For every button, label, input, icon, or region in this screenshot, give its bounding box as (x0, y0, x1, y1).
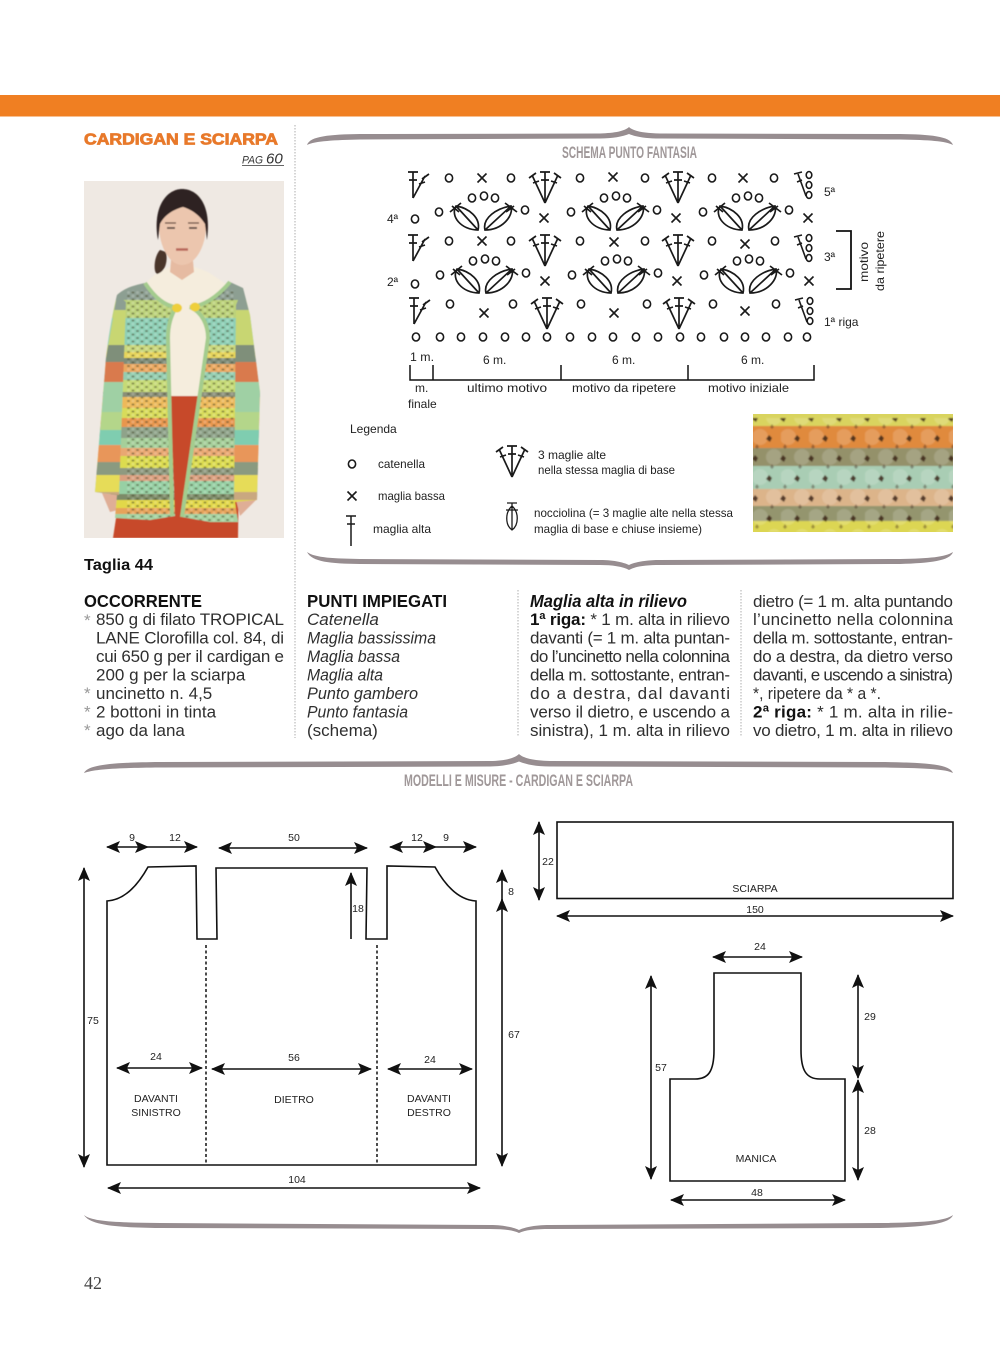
column: stitches used: Maglia bassa (307, 647, 400, 666)
stitch count scale: 1 m. (410, 350, 434, 364)
column: continuation (753, 592, 954, 740)
pattern outline (107, 866, 476, 1165)
measurements: DAVANTI (134, 1093, 178, 1105)
hair (157, 189, 208, 240)
arrows (84, 847, 502, 1188)
photo: model wearing cardigan (84, 181, 284, 538)
column: continuation: 2ª riga: * 1 m. alta in rilie- (753, 702, 953, 722)
measurements: 18 (352, 903, 364, 915)
legend: three double crochet: 3 maglie alte (538, 448, 606, 462)
measurements: 9 (443, 832, 449, 844)
column: raised double crochet: della m. sottostante, entran- (530, 666, 730, 684)
row labels: 3ª (824, 250, 836, 264)
legend: chain: catenella (378, 457, 425, 471)
page reference: 60 (266, 150, 283, 168)
row labels: 1ª riga (824, 315, 859, 329)
row 3 (408, 235, 812, 266)
cardigan pattern schematic (84, 832, 520, 1188)
sleeve pattern schematic: 48 (751, 1187, 763, 1199)
legend: single crochet: maglia bassa (378, 489, 445, 503)
stitch count scale: 6 m. (741, 353, 764, 367)
measurements: DESTRO (407, 1107, 451, 1119)
repeat bracket: motivo (857, 242, 871, 282)
row 5 (408, 172, 812, 203)
legend: chain (348, 457, 425, 471)
column: raised double crochet: 1ª riga: * 1 m. alta in rilievo (530, 610, 730, 629)
scarf pattern schematic: 22 (542, 856, 554, 868)
column: materials: LANE Clorofilla col. 84, di (96, 628, 284, 648)
brace: bottom of stitch chart (307, 552, 953, 570)
column: raised double crochet: do a destra, dal davanti (530, 684, 730, 703)
neck (170, 260, 194, 280)
column: stitches used: PUNTI IMPIEGATI (307, 591, 447, 611)
legend: double crochet (346, 516, 431, 546)
column: materials: * (84, 721, 91, 740)
heading: stitch chart: SCHEMA PUNTO FANTASIA (562, 143, 697, 162)
stitch count scale: ultimo motivo (467, 381, 547, 395)
sleeve pattern schematic: 29 (864, 1011, 876, 1023)
column: materials (84, 591, 284, 740)
measurements: 56 (288, 1052, 300, 1064)
row 2 (411, 255, 814, 293)
repeat bracket (836, 231, 887, 291)
column: raised double crochet: sinistra), 1 m. alta in rilievo (530, 721, 730, 740)
column: raised double crochet: davanti (= 1 m. alta puntan- (530, 628, 730, 648)
column: continuation: davanti, e uscendo a sinistra) (753, 666, 953, 684)
stitch count scale: 6 m. (483, 353, 506, 367)
sleeve pattern schematic: MANICA (736, 1153, 776, 1165)
page number: 42 (84, 1273, 102, 1293)
fold lines (206, 945, 377, 1165)
measurements: 75 (87, 1015, 99, 1027)
row labels: 4ª (387, 212, 399, 226)
hands (102, 493, 118, 512)
stitch count scale: 6 m. (612, 353, 635, 367)
face (159, 205, 206, 265)
stitch count scale (408, 350, 814, 411)
sleeve pattern schematic: 24 (754, 941, 766, 953)
buttons (172, 304, 182, 312)
legend: Legenda (350, 422, 397, 436)
page reference: PAG (242, 154, 263, 166)
measurements: 104 (288, 1174, 306, 1186)
scarf pattern schematic: SCIARPA (732, 883, 778, 895)
row 4 (411, 192, 812, 230)
front bands (145, 283, 176, 516)
sleeve pattern schematic (651, 941, 876, 1200)
row 1 (409, 298, 813, 329)
stitch count scale: finale (408, 397, 437, 411)
column: materials: ago da lana (96, 721, 185, 740)
measurements (87, 832, 520, 1186)
foundation chain (412, 333, 811, 341)
column: raised double crochet (530, 591, 731, 740)
row labels: 2ª (387, 275, 399, 289)
repeat bracket: da ripetere (873, 231, 887, 291)
column: stitches used: Punto fantasia (307, 702, 408, 722)
heading: patterns: MODELLI E MISURE - CARDIGAN E SCIARPA (404, 771, 633, 790)
brace: top of patterns (84, 754, 953, 773)
measurements: 12 (169, 832, 181, 844)
column: materials: uncinetto n. 4,5 (96, 684, 212, 703)
swatch photo (745, 408, 961, 540)
measurements: 67 (508, 1029, 520, 1041)
sleeve pattern schematic: 28 (864, 1125, 876, 1137)
column: stitches used (307, 591, 447, 740)
crochet stitch chart (408, 172, 814, 341)
column: continuation: l’uncinetto nella colonnina (753, 610, 954, 629)
sleeve pattern schematic: 57 (655, 1062, 667, 1074)
column: raised double crochet: verso il dietro, e uscendo a (530, 702, 731, 722)
legend: puff stitch (506, 503, 733, 536)
column: continuation: *, ripetere da * a *. (753, 684, 881, 703)
size label: Taglia 44 (84, 557, 153, 574)
legend: puff stitch: maglia di base e chiuse insieme) (534, 522, 702, 536)
measurements: SINISTRO (131, 1107, 181, 1119)
legend: three double crochet (496, 446, 675, 477)
legend (346, 422, 733, 546)
legend: three double crochet: nella stessa maglia di base (538, 463, 675, 477)
measurements: 50 (288, 832, 300, 844)
title: CARDIGAN E SCIARPA (84, 132, 278, 148)
column: raised double crochet: do l’uncinetto nella colonnina (530, 647, 731, 666)
ponytail (155, 250, 167, 274)
column: stitches used: (schema) (307, 721, 378, 740)
dotted column dividers (295, 125, 741, 738)
measurements: 12 (411, 832, 423, 844)
brace: bottom of patterns (84, 1215, 953, 1233)
sleeve stripes (94, 300, 260, 500)
measurements: DAVANTI (407, 1093, 451, 1105)
legend: single crochet (348, 489, 445, 503)
column: continuation: do a destra, da dietro verso (753, 647, 953, 666)
column: materials: cui 650 g per il cardigan e (96, 647, 284, 666)
column: stitches used: Maglia bassissima (307, 628, 436, 648)
column: materials: * (84, 684, 91, 703)
stitch count scale: motivo da ripetere (572, 381, 676, 395)
measurements: 8 (508, 886, 514, 898)
stitch count scale: m. (415, 381, 428, 395)
measurements: 24 (150, 1051, 162, 1063)
page reference (242, 150, 284, 168)
column: stitches used: Punto gambero (307, 684, 418, 703)
orange header band (0, 95, 1000, 116)
column: materials: OCCORRENTE (84, 591, 202, 611)
scarf pattern schematic: 150 (746, 904, 764, 916)
measurements: 24 (424, 1054, 436, 1066)
column: continuation: della m. sottostante, entran- (753, 628, 953, 648)
row labels (387, 185, 859, 329)
scarf pattern schematic (539, 822, 953, 916)
column: materials: * (84, 611, 91, 630)
row labels: 5ª (824, 185, 836, 199)
skirt (113, 394, 240, 538)
legend: double crochet: maglia alta (373, 522, 431, 536)
column: materials: 2 bottoni in tinta (96, 702, 217, 722)
cardigan stripes (90, 280, 265, 525)
legend: puff stitch: nocciolina (= 3 maglie alte nella stessa (534, 506, 733, 520)
shirt (155, 268, 198, 397)
brace: top of stitch chart (307, 127, 953, 145)
column: materials: 200 g per la sciarpa (96, 666, 246, 684)
stitch count scale: motivo iniziale (708, 381, 789, 395)
measurements: 9 (129, 832, 135, 844)
measurements: DIETRO (274, 1094, 314, 1106)
column: raised double crochet: Maglia alta in rilievo (530, 591, 687, 611)
column: stitches used: Maglia alta (307, 666, 383, 684)
column: continuation: vo dietro, 1 m. alta in rilievo (753, 721, 953, 740)
column: materials: * (84, 702, 91, 722)
column: stitches used: Catenella (307, 610, 379, 629)
column: continuation: dietro (= 1 m. alta puntando (753, 592, 953, 611)
column: materials: 850 g di filato TROPICAL (96, 610, 284, 629)
